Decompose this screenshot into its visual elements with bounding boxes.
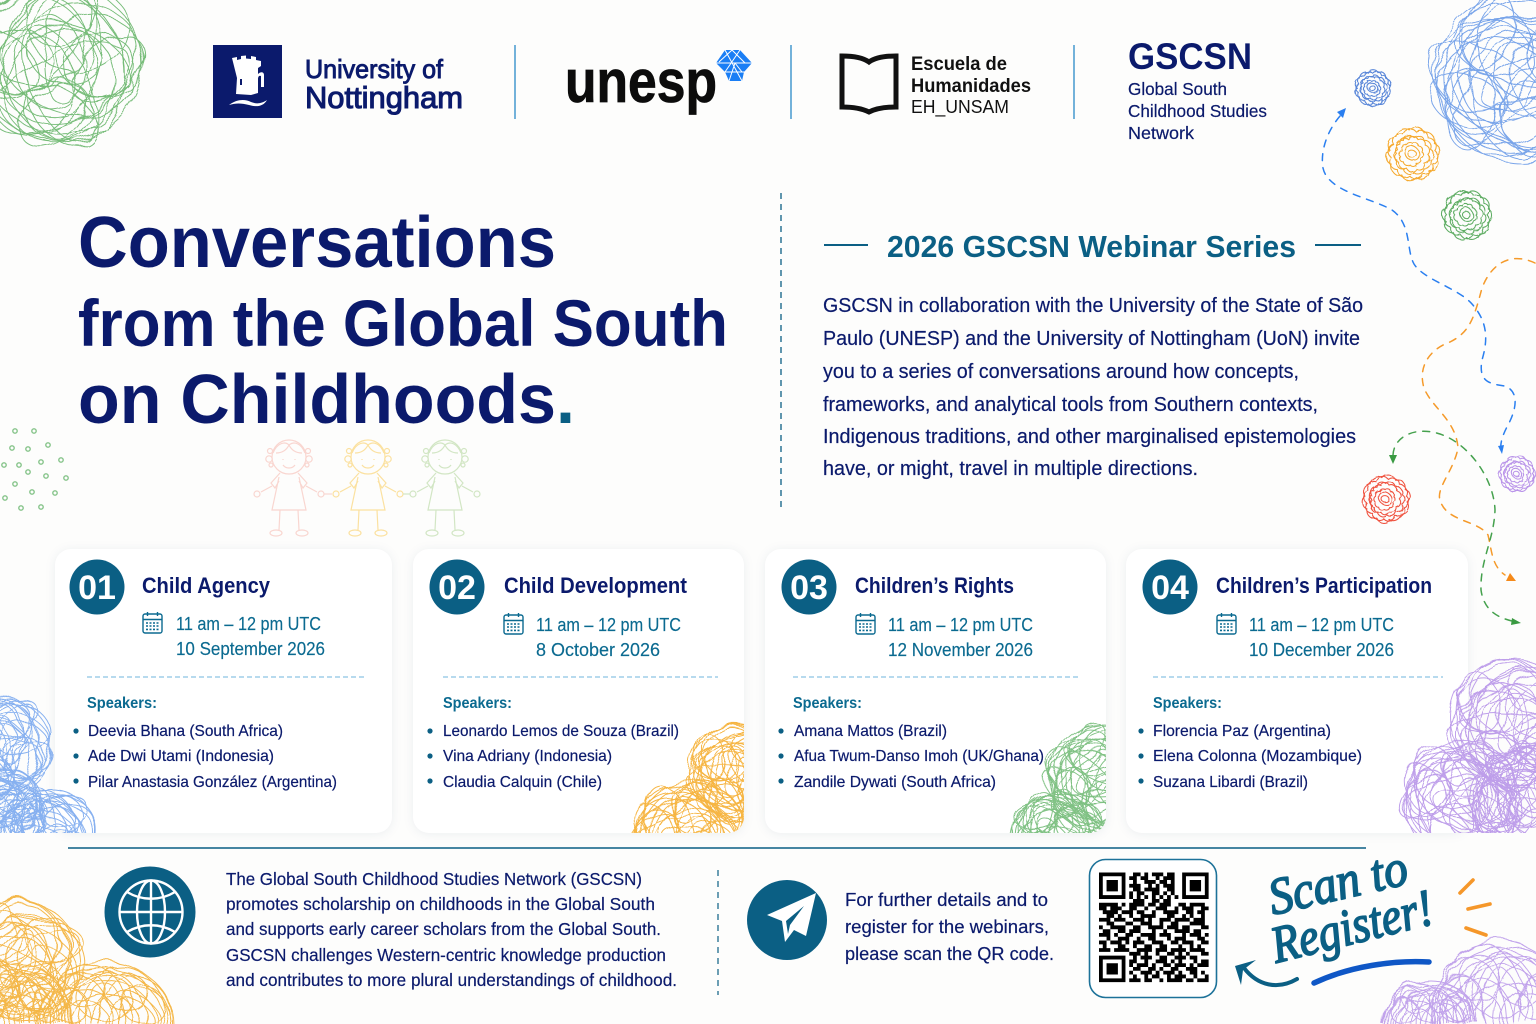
about GSCSN text: and contributes to more plural understandings of childhood. <box>226 970 677 990</box>
registration text: For further details and to <box>845 890 1048 910</box>
logo dividers <box>515 45 1074 119</box>
session time and date: 11 am – 12 pm UTC <box>536 615 681 635</box>
about GSCSN text: promotes scholarship on childhoods in the Global South <box>226 894 655 914</box>
speakers label: Speakers: <box>87 695 157 712</box>
scribble: purple lower right <box>1398 658 1536 833</box>
scribble: green top left <box>0 0 147 148</box>
heading: webinar series: 2026 GSCSN Webinar Series <box>887 229 1296 264</box>
scribble: purple bottom right <box>1380 936 1536 1024</box>
registration text: register for the webinars, <box>845 917 1049 937</box>
QR code <box>1090 860 1216 998</box>
speakers list: Afua Twum-Danso Imoh (UK/Ghana) <box>794 748 1044 765</box>
session time and date <box>888 615 1033 660</box>
logo: Escuela de Humanidades: EH_UNSAM <box>911 97 1009 118</box>
about GSCSN text: GSCSN challenges Western-centric knowledge production <box>226 945 666 965</box>
session time and date: 10 September 2026 <box>176 639 325 659</box>
speakers list: Amana Mattos (Brazil) <box>794 723 947 740</box>
intro paragraph: you to a series of conversations around how concepts, <box>823 361 1299 383</box>
icon: globe <box>104 866 196 958</box>
card 02 <box>412 560 744 834</box>
scribble: green card corner <box>1010 722 1106 833</box>
flowers <box>1352 67 1536 530</box>
title: on Childhoods. <box>78 360 575 438</box>
intro paragraph: GSCSN in collaboration with the University of the State of São <box>823 295 1363 317</box>
session time and date <box>536 615 681 660</box>
footer rule <box>68 847 1366 849</box>
arrow toward QR code <box>1235 960 1297 985</box>
logo: unesp: unesp <box>565 48 717 115</box>
session time and date: 11 am – 12 pm UTC <box>1249 615 1394 635</box>
card title: Child Agency <box>142 573 271 598</box>
speakers list: Elena Colonna (Mozambique) <box>1153 748 1362 765</box>
speakers list: Leonardo Lemos de Souza (Brazil) <box>443 723 679 740</box>
badge 03: 03 <box>790 569 828 607</box>
card 01 <box>55 549 392 833</box>
speakers list <box>1138 723 1362 791</box>
session time and date: 11 am – 12 pm UTC <box>888 615 1033 635</box>
scribble: blue lower left <box>0 695 96 833</box>
registration text <box>845 890 1054 964</box>
scan to register lettering <box>1263 839 1439 975</box>
intro paragraph <box>823 295 1363 480</box>
calendar icon <box>856 613 875 634</box>
logo: University of Nottingham: University of <box>305 54 444 84</box>
dashed arrow: blue <box>1322 108 1515 454</box>
intro paragraph: frameworks, and analytical tools from Southern contexts, <box>823 394 1318 416</box>
logo: GSCSN: Global South <box>1128 79 1227 99</box>
calendar icon <box>504 613 523 634</box>
dashed arrow: orange <box>1422 259 1535 581</box>
session time and date: 10 December 2026 <box>1249 640 1394 660</box>
about GSCSN text: The Global South Childhood Studies Network (GSCSN) <box>226 869 642 889</box>
scan to register lettering: Scan to <box>1263 839 1413 927</box>
card title: Child Development <box>504 573 688 598</box>
logo: GSCSN: GSCSN <box>1128 36 1252 77</box>
registration text: please scan the QR code. <box>845 944 1054 964</box>
footer dashed divider <box>717 870 719 995</box>
card 04 <box>1126 549 1468 833</box>
intro paragraph: have, or might, travel in multiple directions. <box>823 458 1198 480</box>
speakers list: Deevia Bhana (South Africa) <box>88 723 283 740</box>
card title: Children’s Participation <box>1216 573 1432 598</box>
orange accent marks <box>1460 880 1490 935</box>
scribble: orange bottom left <box>0 895 174 1024</box>
scribble: orange card corner <box>632 722 744 833</box>
speakers list <box>427 723 679 791</box>
session time and date <box>176 614 325 659</box>
speakers list: Pilar Anastasia González (Argentina) <box>88 774 337 791</box>
underline <box>1314 962 1429 983</box>
session time and date: 11 am – 12 pm UTC <box>176 614 321 634</box>
logo: Escuela de Humanidades: Escuela de <box>911 54 1007 75</box>
logo: Escuela de Humanidades <box>842 54 1031 118</box>
card title: Children’s Rights <box>855 573 1014 598</box>
logo: GSCSN: Childhood Studies <box>1128 101 1267 121</box>
badge 04 <box>1142 560 1198 614</box>
session time and date: 8 October 2026 <box>536 640 660 660</box>
dashed arrow: green <box>1389 431 1521 625</box>
icon: paper plane <box>747 880 827 960</box>
about GSCSN text: and supports early career scholars from the Global South. <box>226 919 661 939</box>
logo: GSCSN: Network <box>1128 123 1194 143</box>
logo: University of Nottingham <box>213 45 463 118</box>
badge 03 <box>782 560 836 614</box>
speakers list: Ade Dwi Utami (Indonesia) <box>88 748 274 765</box>
intro paragraph: Indigenous traditions, and other marginalised epistemologies <box>823 426 1356 448</box>
vertical dashed divider <box>780 193 782 510</box>
decorative ring dots <box>2 429 68 510</box>
speakers list: Zandile Dywati (South Africa) <box>794 774 996 791</box>
badge 04: 04 <box>1151 569 1189 607</box>
session time and date <box>1249 615 1394 660</box>
scan to register lettering: Register! <box>1264 879 1439 975</box>
card 03 <box>764 560 1106 834</box>
title <box>78 203 728 438</box>
logo: University of Nottingham: Nottingham <box>305 80 463 115</box>
badge 02: 02 <box>438 569 476 607</box>
logo: GSCSN <box>1128 36 1267 143</box>
speakers list: Claudia Calquin (Chile) <box>443 774 602 791</box>
speakers list: Suzana Libardi (Brazil) <box>1153 774 1308 791</box>
speakers list: Florencia Paz (Argentina) <box>1153 723 1331 740</box>
intro paragraph: Paulo (UNESP) and the University of Nottingham (UoN) invite <box>823 328 1360 350</box>
title: from the Global South <box>78 286 728 360</box>
speakers list <box>778 723 1044 791</box>
speakers list: Vina Adriany (Indonesia) <box>443 748 612 765</box>
speakers label: Speakers: <box>1153 695 1222 712</box>
speakers label: Speakers: <box>443 695 512 712</box>
illustration: three children holding hands <box>254 440 480 536</box>
calendar icon <box>143 612 162 633</box>
badge 02 <box>430 560 484 614</box>
title: Conversations <box>78 203 556 283</box>
speakers list <box>73 723 337 791</box>
about GSCSN text <box>226 869 677 990</box>
scribble: blue top right <box>1428 0 1536 165</box>
badge 01 <box>70 560 124 614</box>
calendar icon <box>1217 613 1236 634</box>
session time and date: 12 November 2026 <box>888 640 1033 660</box>
logo: Escuela de Humanidades: Humanidades <box>911 76 1031 97</box>
speakers label: Speakers: <box>793 695 862 712</box>
badge 01: 01 <box>78 569 116 607</box>
